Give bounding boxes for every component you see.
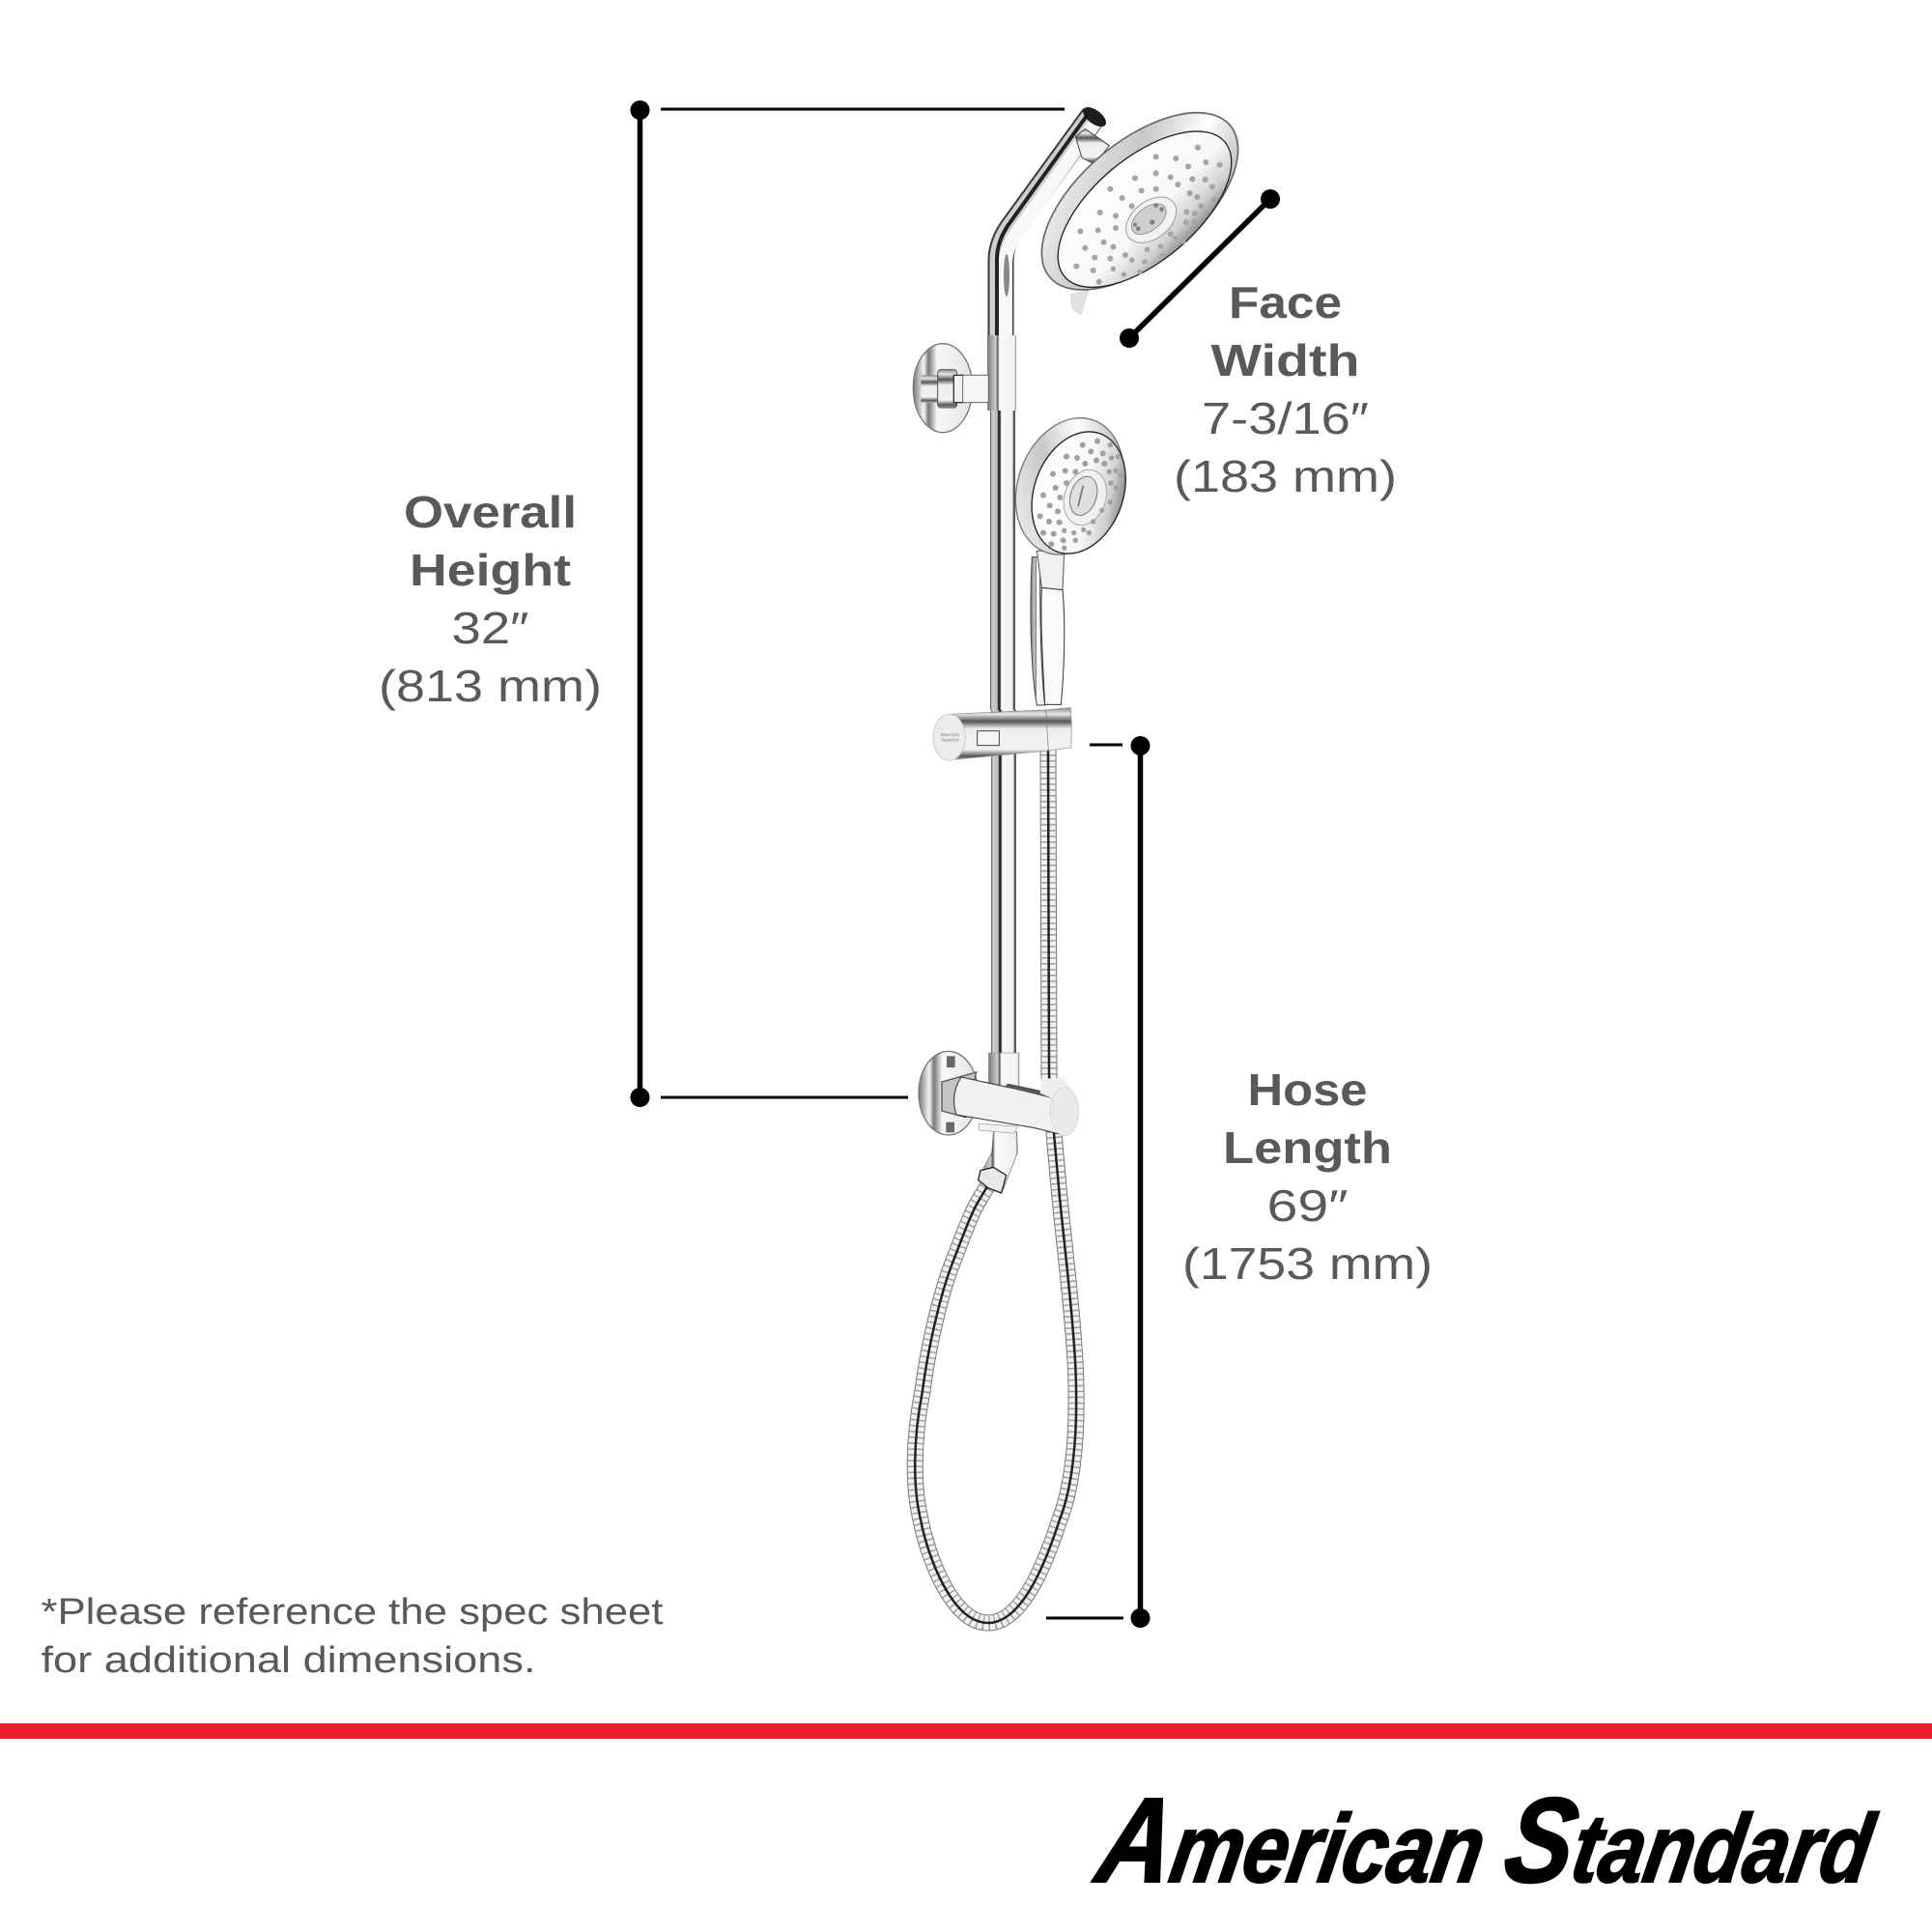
footnote: for additional dimensions.: [41, 1640, 535, 1681]
hand shower: [997, 403, 1142, 705]
spray lever: [1070, 291, 1089, 315]
head rim: [1011, 79, 1268, 323]
flexible hose: [915, 749, 1076, 1623]
flange: [919, 1051, 978, 1135]
upper wall mount: [913, 344, 988, 433]
head connector: [1075, 128, 1109, 164]
nozzles: [1073, 145, 1223, 285]
dimension: overall height: [630, 100, 1065, 1107]
label: hose length: Length: [1223, 1122, 1392, 1173]
collar: [988, 1053, 1019, 1089]
label: face width: 7-3/16″: [1202, 393, 1369, 443]
label: hose length: 69″: [1267, 1180, 1349, 1231]
American Standard logo: American Standard: [1087, 1773, 1887, 1908]
red divider bar: [0, 1723, 1932, 1739]
slider bracket: [933, 708, 1071, 760]
dimension: face width: [1120, 189, 1280, 348]
rain shower head: [1011, 79, 1268, 323]
label: overall height: Height: [410, 545, 571, 595]
shower fixture: [913, 79, 1268, 1623]
footnote: *Please reference the spec sheet: [41, 1592, 664, 1633]
label: overall height: 32″: [452, 603, 529, 653]
label: face width: [1174, 277, 1397, 501]
label: overall height: [379, 487, 602, 711]
footnote: [41, 1592, 664, 1681]
handle: [1031, 551, 1065, 705]
nozzles: [1037, 439, 1122, 551]
riser pipe and angled arm: [987, 103, 1109, 1058]
label: face width: (183 mm): [1174, 451, 1397, 501]
label: hose length: (1753 mm): [1182, 1238, 1433, 1289]
slider bracket: Standard: [941, 738, 959, 743]
label: face width: Face: [1229, 277, 1342, 327]
label: face width: Width: [1211, 335, 1360, 385]
label: overall height: (813 mm): [379, 661, 602, 711]
center spray ring: [1118, 187, 1185, 252]
dimension: hose length: [1046, 736, 1150, 1628]
elbow: [979, 1132, 1017, 1190]
slider bracket: American: [940, 733, 960, 738]
label: overall height: Overall: [404, 487, 577, 537]
diverter body: [954, 1077, 1060, 1134]
hand shower rim: [997, 403, 1142, 570]
dial: [1057, 465, 1114, 530]
label: hose length: [1182, 1065, 1433, 1289]
diverter cap: [1040, 1078, 1072, 1101]
label: hose length: Hose: [1248, 1065, 1368, 1115]
lower wall mount and diverter: [919, 1051, 1079, 1193]
